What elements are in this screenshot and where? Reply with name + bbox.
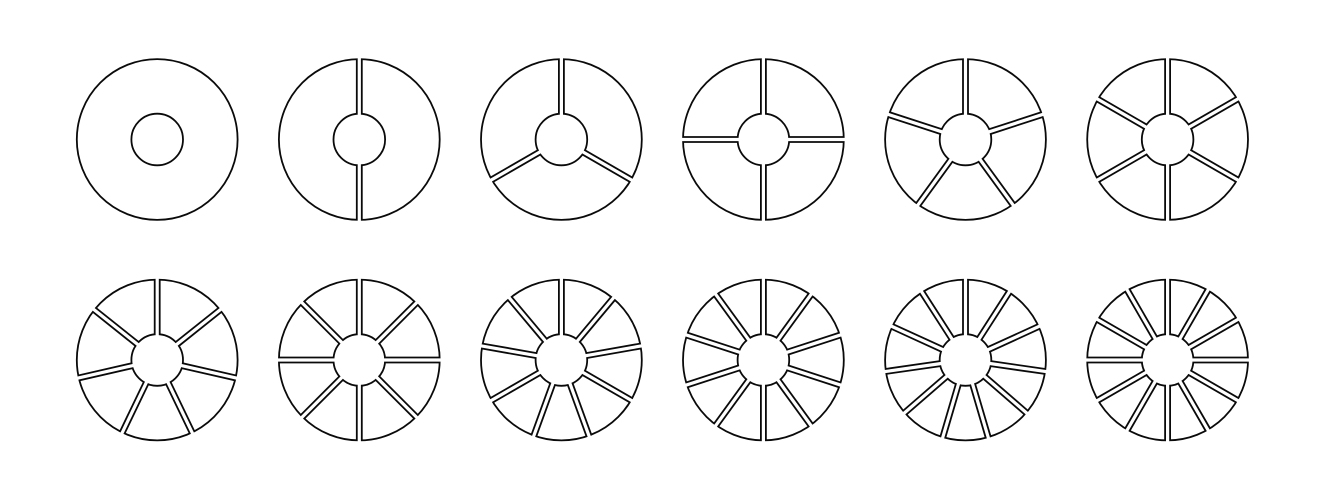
donut: 11 segments <box>882 276 1049 441</box>
donut: 8 segments <box>275 276 443 444</box>
donut: 5 segments <box>885 56 1046 220</box>
donut: 7 segments <box>75 276 239 440</box>
donut: 6 segments <box>1087 56 1248 224</box>
donut: 1 segment <box>77 59 238 220</box>
donut: 9 segments <box>479 276 644 440</box>
donut: 4 segments <box>679 56 847 224</box>
donut: 2 segments <box>279 56 440 224</box>
donut: 12 segments <box>1084 276 1252 444</box>
donut: 3 segments <box>481 56 642 220</box>
donut: 10 segments <box>683 276 844 444</box>
